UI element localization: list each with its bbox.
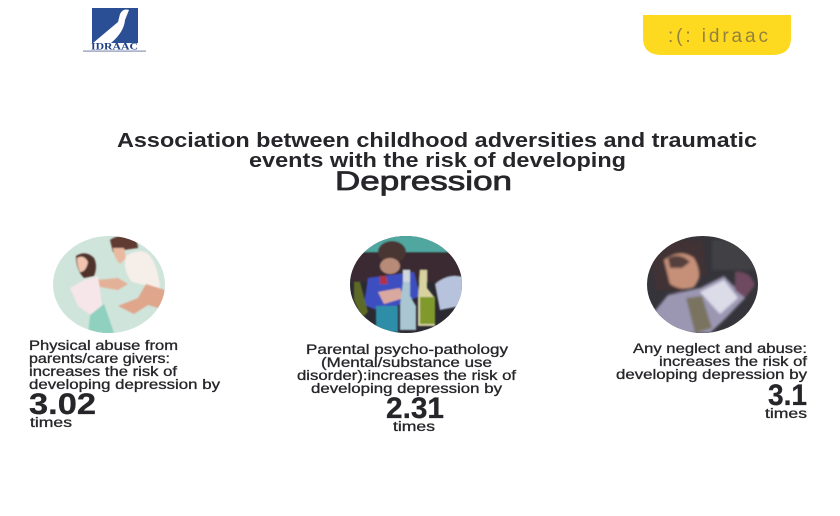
text: parental psycho-pathology: developing depression by xyxy=(311,381,502,396)
logo: IDRAAC: IDRAAC xyxy=(91,42,138,52)
logo: idraac yellow badge: :(: idraac xyxy=(668,26,768,47)
text: physical abuse: Physical abuse from xyxy=(29,338,178,353)
text: physical abuse: parents/care givers: xyxy=(29,351,170,366)
text: neglect and abuse: developing depression by xyxy=(616,367,807,382)
title: events with the risk of developing xyxy=(249,150,626,172)
photo: parent grabbing child xyxy=(53,236,165,333)
text: parental psycho-pathology: 2.31 xyxy=(386,392,444,425)
text: physical abuse xyxy=(29,338,220,430)
logo: IDRAAC xyxy=(83,8,146,52)
text: parental psycho-pathology: (Mental/substance use xyxy=(321,355,492,370)
text: neglect and abuse xyxy=(616,341,807,421)
title: Depression xyxy=(335,166,512,196)
title: Association between childhood adversities and traumatic xyxy=(117,130,757,152)
text: neglect and abuse: Any neglect and abuse: xyxy=(633,341,807,356)
title xyxy=(117,130,757,196)
text: physical abuse: times xyxy=(30,415,72,430)
photo: neglected child xyxy=(647,236,758,333)
text: physical abuse: 3.02 xyxy=(29,388,96,421)
photo: bottles and child xyxy=(350,236,462,333)
text: neglect and abuse: increases the risk of xyxy=(659,354,807,369)
text: parental psycho-pathology: times xyxy=(393,419,435,434)
text: parental psycho-pathology: disorder):increases the risk of xyxy=(297,368,516,383)
logo: idraac yellow badge xyxy=(643,15,791,55)
text: neglect and abuse: 3.1 xyxy=(768,379,807,412)
text: physical abuse: increases the risk of xyxy=(29,364,177,379)
text: neglect and abuse: times xyxy=(765,406,807,421)
text: parental psycho-pathology: Parental psycho-pathology xyxy=(306,342,508,357)
text: physical abuse: developing depression by xyxy=(29,377,220,392)
text: parental psycho-pathology xyxy=(297,342,516,434)
